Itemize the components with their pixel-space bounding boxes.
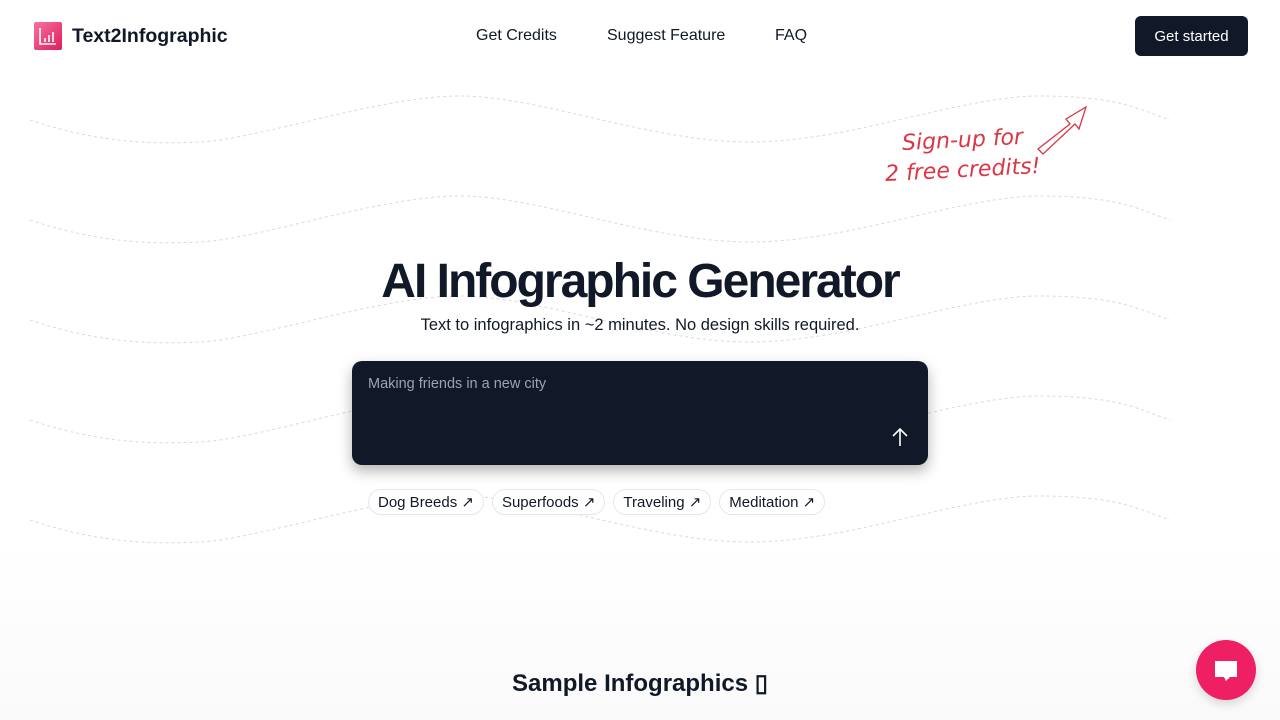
input box xyxy=(352,361,928,465)
text: Suggest Feature xyxy=(607,27,725,44)
callout: sign-up: Sign-up for xyxy=(901,125,1024,156)
button: get started: Get started xyxy=(1154,28,1229,44)
title: AI Infographic Generator xyxy=(381,255,899,308)
text: FAQ xyxy=(775,27,807,44)
input box: Making friends in a new city xyxy=(368,376,546,392)
suggestion chips xyxy=(368,489,825,515)
section heading: Sample Infographics ▯ xyxy=(512,670,768,697)
suggestion chips: Meditation ↗ xyxy=(729,494,815,511)
chat button xyxy=(1196,640,1256,700)
suggestion chips: Traveling ↗ xyxy=(623,494,701,511)
suggestion chips: Dog Breeds ↗ xyxy=(378,494,474,511)
callout: sign-up xyxy=(884,106,1088,187)
subtitle: Text to infographics in ~2 minutes. No design skills required. xyxy=(421,316,859,334)
button: get started xyxy=(1135,16,1248,56)
callout: sign-up: 2 free credits! xyxy=(884,154,1041,187)
suggestion chips: Superfoods ↗ xyxy=(502,494,595,511)
logo xyxy=(34,22,228,50)
arrow xyxy=(1037,106,1088,155)
icon: chart logo xyxy=(34,22,62,50)
text: Get Credits xyxy=(476,27,557,44)
navigation xyxy=(476,27,807,44)
logo: Text2Infographic xyxy=(72,25,228,47)
icon: send arrow xyxy=(892,428,908,446)
